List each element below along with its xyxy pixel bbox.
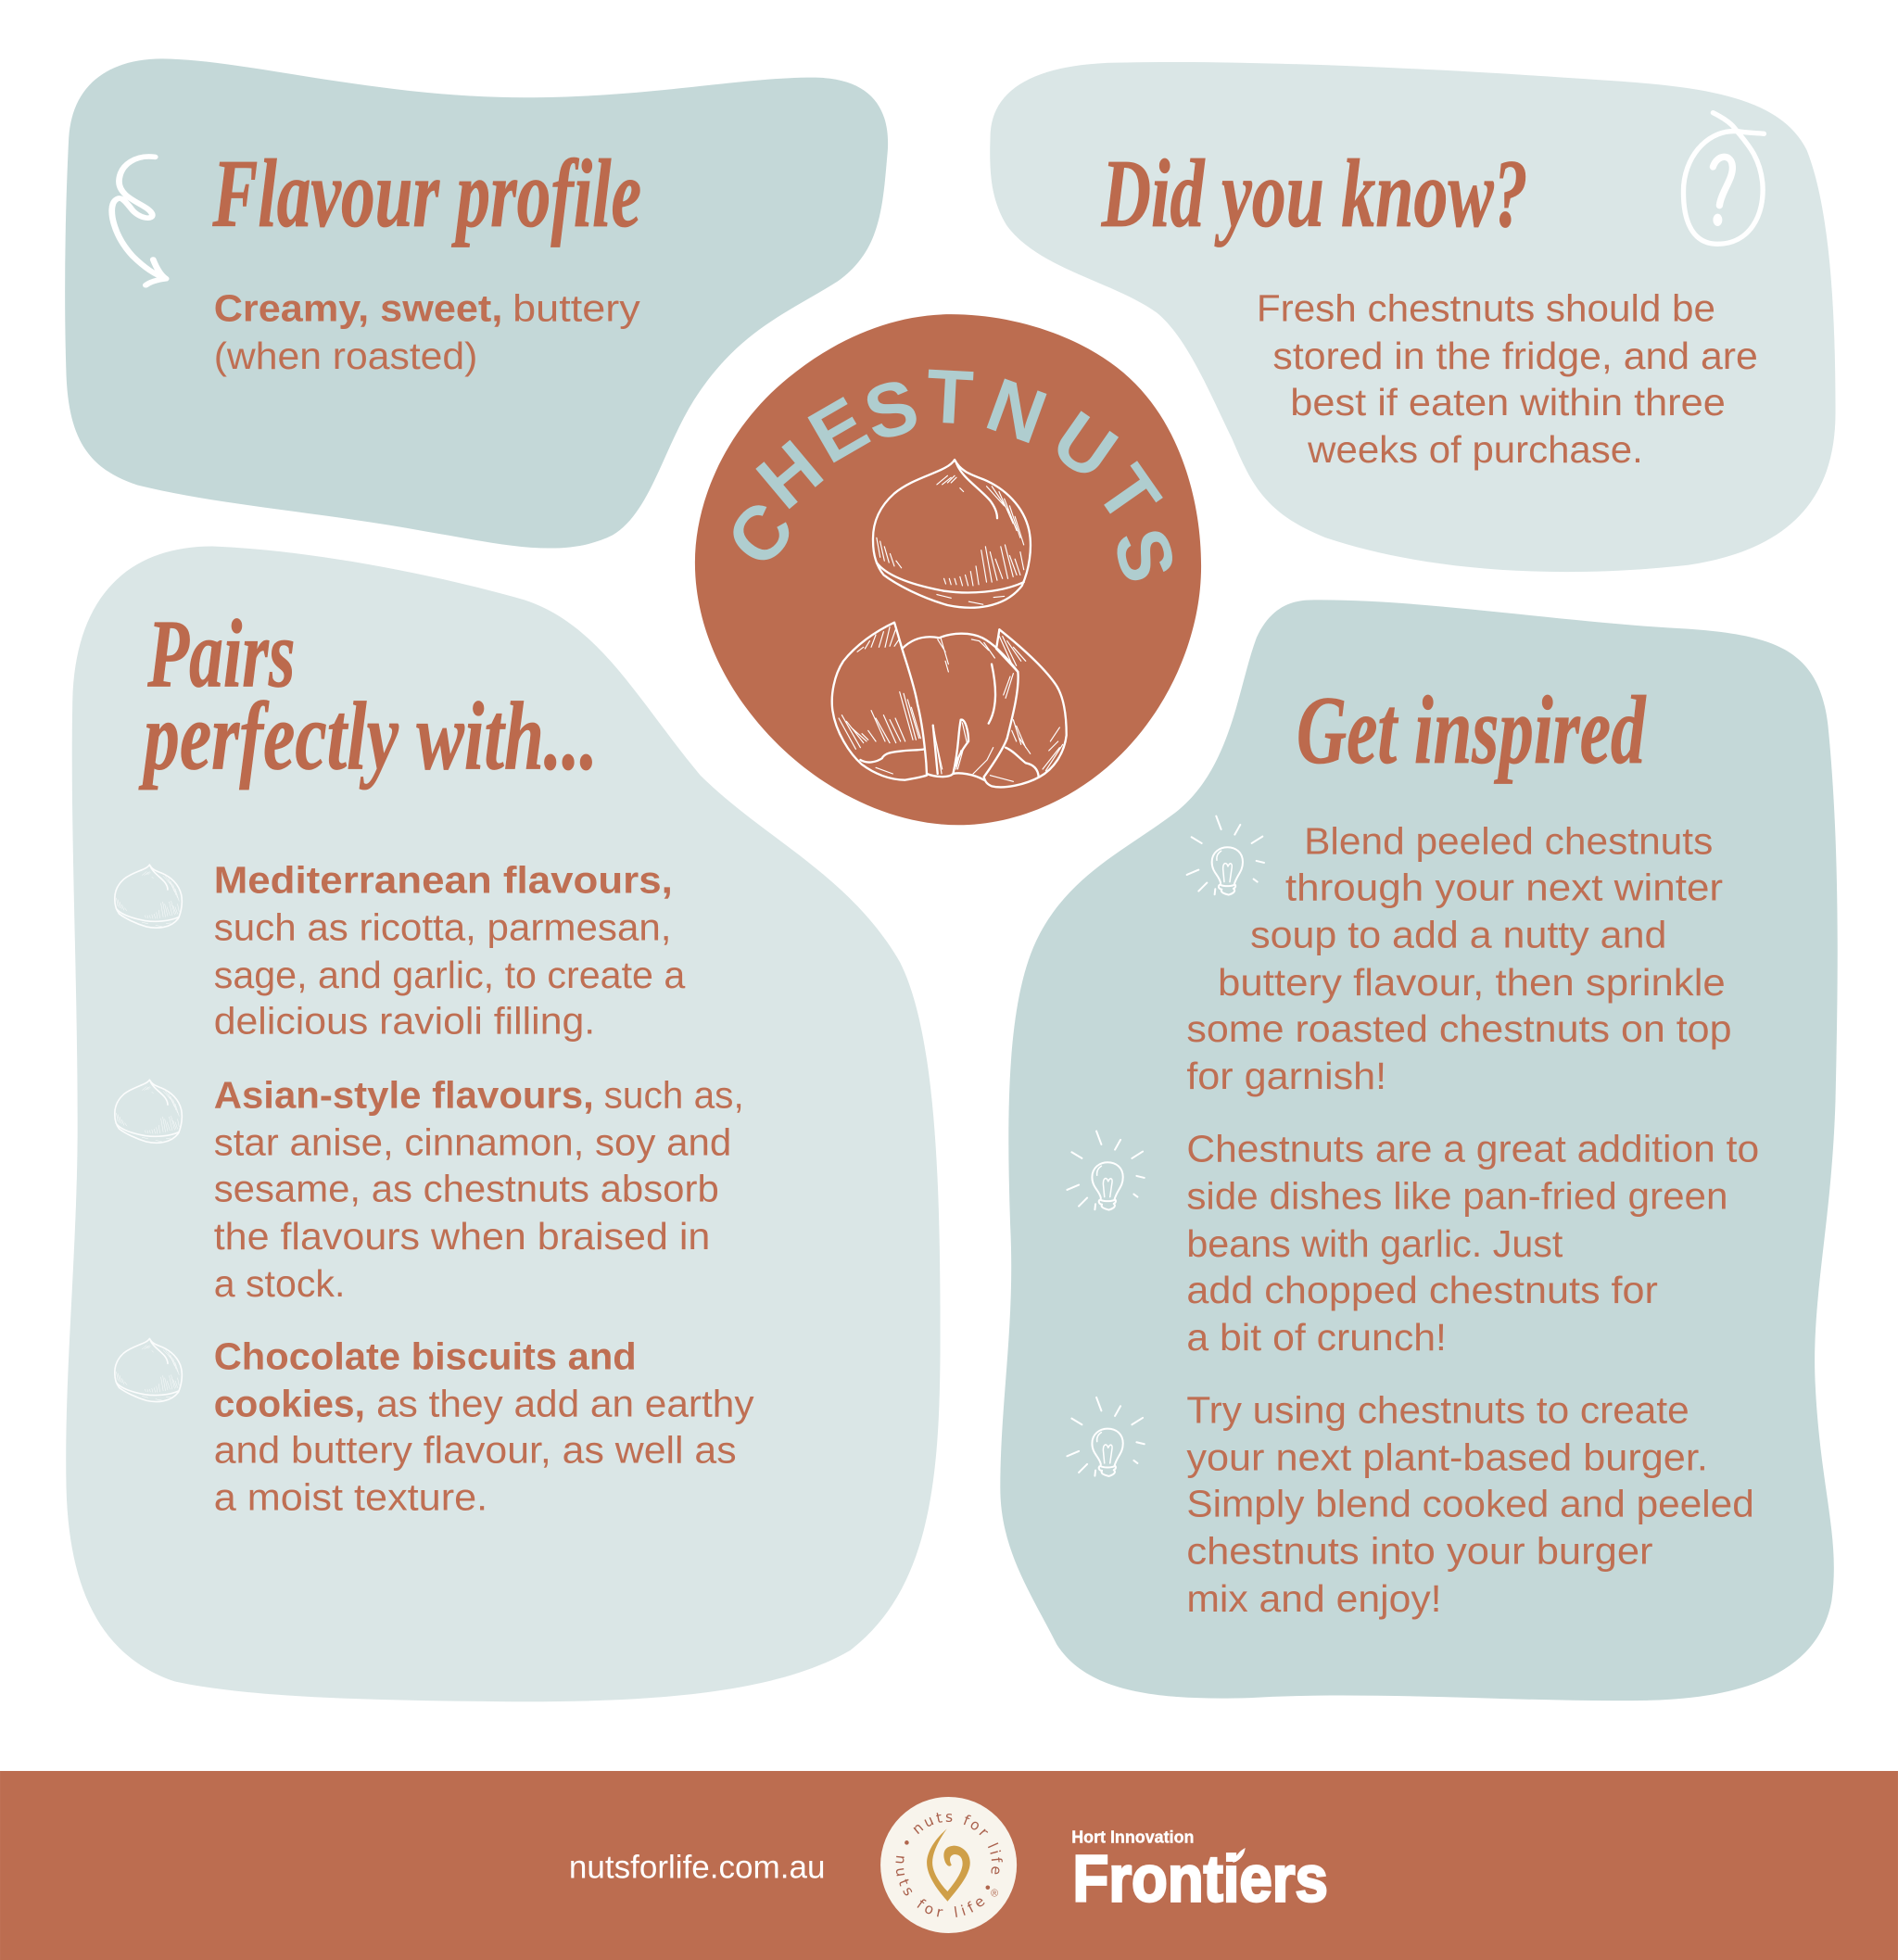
- logo: nuts for life: [880, 1797, 1018, 1933]
- heading: flavour profile: Flavour profile: [212, 139, 641, 247]
- icon: light bulb 3: [1067, 1397, 1145, 1476]
- text: chocolate biscuits and cookies: a moist texture.: [214, 1476, 487, 1519]
- logo heart: [927, 1828, 970, 1902]
- logo leaf: [1233, 1848, 1246, 1863]
- text: asian-style flavours: Asian-style flavours,: [214, 1073, 594, 1116]
- text: chocolate biscuits and cookies: as they add an earthy: [376, 1383, 754, 1425]
- text: storage fact: stored in the fridge, and are: [1272, 335, 1758, 377]
- text: soup tip: Blend peeled chestnuts: [1304, 819, 1713, 862]
- footer background: [0, 1771, 1898, 1960]
- badge background and title: [695, 314, 1201, 825]
- text: chocolate biscuits and cookies: Chocolate biscuits and: [214, 1334, 637, 1377]
- text: side dishes tip: beans with garlic. Just: [1186, 1222, 1563, 1265]
- text: flavour description: Creamy, sweet,: [214, 287, 502, 330]
- logo small text: Hort Innovation: [1071, 1828, 1194, 1848]
- logo dots and registered mark: [905, 1840, 998, 1900]
- text: asian-style flavours: such as,: [604, 1073, 744, 1116]
- text: side dishes tip: side dishes like pan-fried green: [1186, 1175, 1727, 1218]
- text: storage fact: Fresh chestnuts should be: [1257, 287, 1715, 330]
- logo ring text: bottom: [896, 1855, 985, 1917]
- text: side dishes tip: add chopped chestnuts for: [1186, 1269, 1658, 1311]
- text: mediterranean flavours: such as ricotta, parmesan,: [214, 906, 671, 949]
- text: chocolate biscuits and cookies: and buttery flavour, as well as: [214, 1428, 737, 1471]
- icon: chestnut 3: [115, 1338, 182, 1402]
- text: burger tip: mix and enjoy!: [1186, 1577, 1442, 1620]
- logo: nuts for life: nuts for life: [914, 1813, 1003, 1874]
- text: burger tip: Simply blend cooked and peeled: [1186, 1482, 1754, 1524]
- panel background: get inspired: [1000, 600, 1838, 1701]
- panel: did you know: [990, 62, 1836, 572]
- heading: pairs perfectly with: Pairs: [147, 600, 295, 708]
- text: side dishes tip: Chestnuts are a great addition to: [1186, 1127, 1759, 1170]
- text: flavour description: (when roasted): [214, 335, 477, 377]
- icon: chestnut 1: [115, 865, 182, 928]
- logo: nuts for life: nuts for life: [895, 1855, 984, 1917]
- panel background: pairs: [66, 547, 941, 1701]
- illustration: split chestnut: [832, 623, 1067, 787]
- logo: Hort Innovation Frontiers: [1071, 1828, 1328, 1915]
- text: asian-style flavours: the flavours when braised in: [214, 1215, 710, 1258]
- panel background: flavour profile: [65, 58, 888, 549]
- logo dots and registered mark: ®: [991, 1889, 998, 1900]
- text: asian-style flavours: a stock.: [214, 1262, 345, 1305]
- panel background: did you know: [990, 62, 1836, 572]
- text: asian-style flavours: star anise, cinnamon, soy and: [214, 1121, 731, 1164]
- icon: light bulb 1: [1187, 816, 1264, 895]
- illustration: whole chestnut: [873, 460, 1031, 608]
- central badge: chestnuts: [695, 314, 1201, 825]
- text: storage fact: best if eaten within three: [1290, 381, 1726, 424]
- icon: chestnut 2: [115, 1080, 182, 1143]
- text: soup tip: buttery flavour, then sprinkle: [1218, 961, 1726, 1004]
- text: flavour description: buttery: [512, 287, 641, 330]
- text: soup tip: some roasted chestnuts on top: [1186, 1007, 1732, 1050]
- footer band: [0, 1771, 1898, 1960]
- logo ring text: top: [917, 1822, 992, 1875]
- logo disc: [880, 1797, 1017, 1933]
- text: mediterranean flavours: delicious ravioli filling.: [214, 1000, 595, 1043]
- text: asian-style flavours: sesame, as chestnuts absorb: [214, 1167, 719, 1209]
- title: CHESTNUTS on an arc: CHESTNUTS: [711, 354, 1191, 591]
- logo large text: Frontiers: [1073, 1841, 1328, 1915]
- panel: flavour profile: [65, 58, 888, 549]
- website link: nutsforlife.com.au: [569, 1849, 825, 1885]
- text: storage fact: weeks of purchase.: [1307, 428, 1643, 471]
- panel: get inspired: [1000, 600, 1838, 1701]
- text: soup tip: soup to add a nutty and: [1250, 914, 1666, 956]
- heading: did you know: Did you know?: [1101, 139, 1528, 247]
- text: burger tip: Try using chestnuts to create: [1186, 1388, 1689, 1431]
- text: mediterranean flavours: Mediterranean flavours,: [214, 858, 673, 901]
- text: soup tip: through your next winter: [1285, 866, 1723, 908]
- icon: curly arrow: [112, 157, 166, 285]
- text: soup tip: for garnish!: [1186, 1055, 1386, 1097]
- panel: pairs perfectly with: [66, 547, 941, 1701]
- icon: question mark in nut: [1684, 113, 1764, 244]
- text: chocolate biscuits and cookies: cookies,: [214, 1383, 365, 1425]
- heading: pairs perfectly with: perfectly with...: [138, 682, 598, 790]
- heading: get inspired: Get inspired: [1297, 676, 1646, 784]
- text: mediterranean flavours: sage, and garlic, to create a: [214, 954, 686, 996]
- badge background: [695, 314, 1201, 825]
- icon: light bulb 2: [1067, 1132, 1145, 1210]
- text: burger tip: your next plant-based burger.: [1186, 1436, 1708, 1479]
- text: side dishes tip: a bit of crunch!: [1186, 1316, 1447, 1359]
- text: burger tip: chestnuts into your burger: [1186, 1530, 1653, 1573]
